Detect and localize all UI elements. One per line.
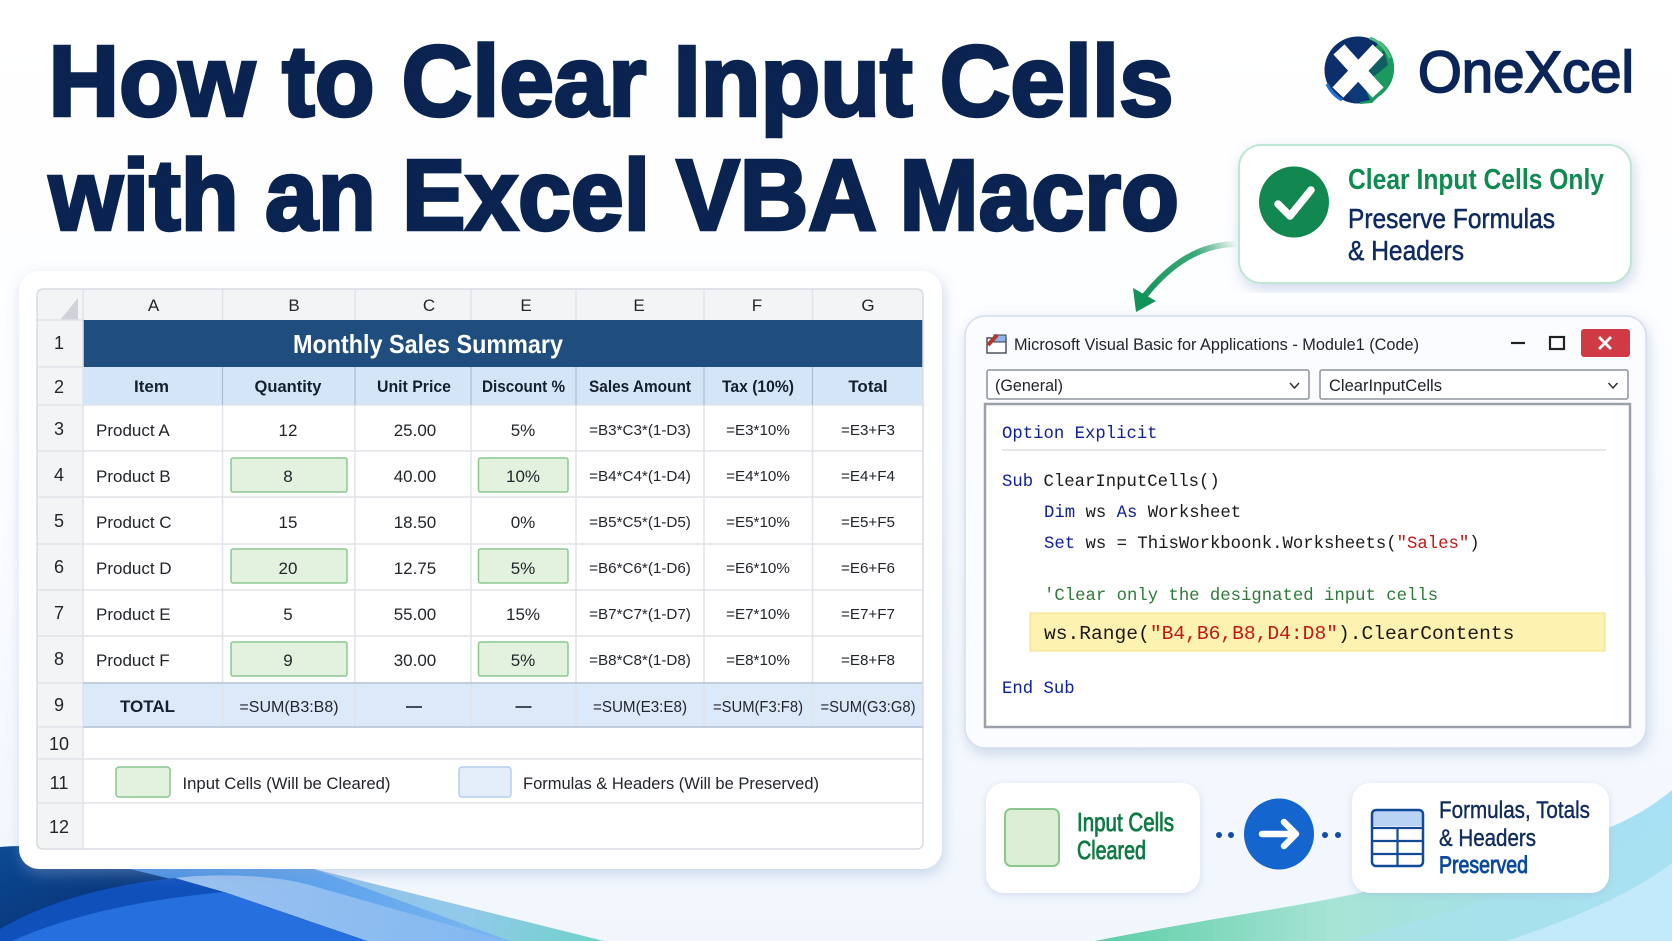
row 5: =B5*C5*(1-D5)	[589, 514, 691, 531]
row 8: 9	[283, 651, 293, 670]
label: input cells cleared: Input Cells	[1077, 807, 1174, 837]
row 6: 20	[279, 559, 297, 578]
input cells highlighted green	[231, 458, 568, 676]
callout text: & Headers	[1348, 235, 1464, 266]
row 3: Product A	[96, 421, 170, 440]
row 5: 0%	[511, 513, 535, 532]
row 3: =E3*10%	[726, 422, 790, 439]
total row: TOTAL	[120, 697, 175, 716]
row 6: Product D	[96, 559, 172, 578]
row 6: =B6*C6*(1-D6)	[589, 560, 691, 577]
icon: table	[1372, 810, 1423, 866]
row 7: =E7+F7	[841, 606, 895, 623]
row 4: 10%	[506, 467, 540, 486]
arrow from callout to code window	[1133, 244, 1237, 312]
row 4: =B4*C4*(1-D4)	[589, 468, 691, 485]
highlighted code line	[1030, 613, 1605, 651]
row 5: 18.50	[394, 513, 436, 532]
legend: Formulas & Headers (Will be Preserved)	[523, 774, 819, 793]
row 6: 12.75	[394, 559, 436, 578]
row 5	[96, 513, 895, 532]
row 3: 5%	[511, 421, 535, 440]
row 7	[96, 605, 895, 624]
row 8: 5%	[511, 651, 535, 670]
row 8: =E8*10%	[726, 652, 790, 669]
table header row: Unit Price	[377, 377, 451, 396]
row numbers: 6	[54, 557, 64, 577]
row 7: =B7*C7*(1-D7)	[589, 606, 691, 623]
row numbers: 11	[50, 773, 68, 793]
row numbers: 8	[54, 649, 64, 669]
column headers: E	[520, 296, 532, 315]
table header row: Item	[134, 377, 169, 396]
row 3: 25.00	[394, 421, 436, 440]
row 8	[96, 651, 895, 670]
VBA code: Set ws = ThisWorkboonk.Worksheets("Sales")	[1044, 535, 1480, 554]
VBA code: End Sub	[1002, 680, 1075, 699]
panel: input cells cleared	[986, 783, 1200, 893]
row 7: Product E	[96, 605, 171, 624]
VBA code: ws.Range("B4,B6,B8,D4:D8").ClearContents	[1044, 623, 1514, 645]
table header row	[134, 377, 888, 396]
column headers: B	[288, 296, 300, 315]
legend: Input Cells (Will be Cleared)	[182, 774, 390, 793]
row 7: 5	[283, 605, 293, 624]
row numbers: 12	[49, 817, 69, 837]
title: with an Excel VBA Macro	[48, 139, 1179, 251]
row 4: Product B	[96, 467, 171, 486]
column headers: E	[633, 296, 645, 315]
table header row: Discount %	[482, 377, 565, 396]
icon: green cell	[1005, 809, 1059, 866]
VBA code: 'Clear only the designated input cells	[1044, 587, 1438, 606]
panel: spreadsheet card	[19, 271, 942, 869]
panel: VBA editor window	[965, 316, 1646, 748]
row 4: 8	[283, 467, 293, 486]
title	[48, 26, 1179, 251]
row 6: 5%	[511, 559, 535, 578]
dropdown: general	[987, 370, 1309, 399]
row 5: =E5+F5	[841, 514, 895, 531]
row numbers: 3	[54, 419, 64, 439]
callout text: Clear Input Cells Only	[1348, 164, 1604, 196]
row numbers: 10	[49, 734, 69, 754]
row 8: =B8*C8*(1-D8)	[589, 652, 691, 669]
table header row: Quantity	[254, 377, 322, 396]
VBA code: Option Explicit	[1002, 425, 1158, 444]
row numbers	[49, 333, 69, 837]
row 4: =E4*10%	[726, 468, 790, 485]
column headers: A	[148, 296, 160, 315]
icon: green check circle	[1259, 166, 1329, 238]
total row: =SUM(G3:G8)	[820, 699, 916, 716]
window title: Microsoft Visual Basic for Applications - Module1 (Code)	[1014, 336, 1419, 354]
label: formulas preserved: & Headers	[1439, 825, 1536, 852]
row 7: =E7*10%	[726, 606, 790, 623]
column headers: F	[752, 296, 762, 315]
code panel	[985, 404, 1630, 727]
arrow connector with dots	[1216, 798, 1341, 870]
column headers: C	[423, 296, 435, 315]
row 5: 15	[279, 513, 297, 532]
row 6: =E6*10%	[726, 560, 790, 577]
row 7: 15%	[506, 605, 540, 624]
column headers: G	[861, 296, 875, 315]
row numbers: 4	[54, 465, 64, 485]
VBA code: Sub ClearInputCells()	[1002, 473, 1220, 492]
row 4: =E4+F4	[841, 468, 895, 485]
row 3: 12	[279, 421, 297, 440]
label: formulas preserved	[1439, 797, 1590, 879]
row 3: =B3*C3*(1-D3)	[589, 422, 691, 439]
dropdown: procedure	[1320, 370, 1628, 399]
row 6	[96, 559, 895, 578]
total row	[120, 697, 916, 716]
legend	[116, 767, 819, 797]
row 7: 55.00	[394, 605, 436, 624]
icon: VBA window	[987, 335, 1006, 353]
title: How to Clear Input Cells	[48, 26, 1174, 138]
label: formulas preserved: Preserved	[1439, 852, 1528, 879]
label: formulas preserved: Formulas, Totals	[1439, 797, 1590, 824]
row 5: =E5*10%	[726, 514, 790, 531]
row 4	[96, 467, 895, 486]
icon: logo X mark	[1324, 36, 1394, 104]
table header row: Total	[848, 377, 888, 396]
table header row: Sales Amount	[589, 377, 691, 396]
label: input cells cleared: Cleared	[1077, 835, 1146, 865]
panel: formulas preserved	[1352, 783, 1609, 893]
dropdown: procedure: ClearInputCells	[1329, 377, 1442, 395]
VBA code	[1002, 425, 1514, 699]
row 5: Product C	[96, 513, 172, 532]
table title: Monthly Sales Summary	[293, 329, 563, 359]
column headers	[148, 296, 875, 315]
row numbers: 7	[54, 603, 64, 623]
row 3: =E3+F3	[841, 422, 895, 439]
callout text: Preserve Formulas	[1348, 203, 1555, 234]
row 6: =E6+F6	[841, 560, 895, 577]
callout text	[1348, 164, 1604, 266]
logo wordmark: OneXcel	[1418, 40, 1634, 105]
row numbers: 5	[54, 511, 64, 531]
callout: clear input cells only	[1239, 145, 1631, 283]
row numbers: 2	[54, 377, 64, 397]
VBA code: Dim ws As Worksheet	[1044, 504, 1241, 523]
dropdown: general: (General)	[995, 377, 1063, 395]
table header row: Tax (10%)	[722, 377, 794, 396]
logo: OneXcel	[1324, 36, 1634, 105]
spreadsheet grid	[37, 289, 923, 849]
row 8: 30.00	[394, 651, 436, 670]
label: input cells cleared	[1077, 807, 1174, 865]
row 3	[96, 421, 895, 440]
total row: =SUM(E3:E8)	[593, 699, 687, 716]
row 4: 40.00	[394, 467, 436, 486]
total row: =SUM(B3:B8)	[239, 699, 339, 716]
row numbers: 9	[54, 695, 64, 715]
window controls	[1511, 329, 1630, 357]
row 8: =E8+F8	[841, 652, 895, 669]
row 8: Product F	[96, 651, 170, 670]
total row: =SUM(F3:F8)	[713, 699, 803, 716]
row numbers: 1	[54, 333, 64, 353]
